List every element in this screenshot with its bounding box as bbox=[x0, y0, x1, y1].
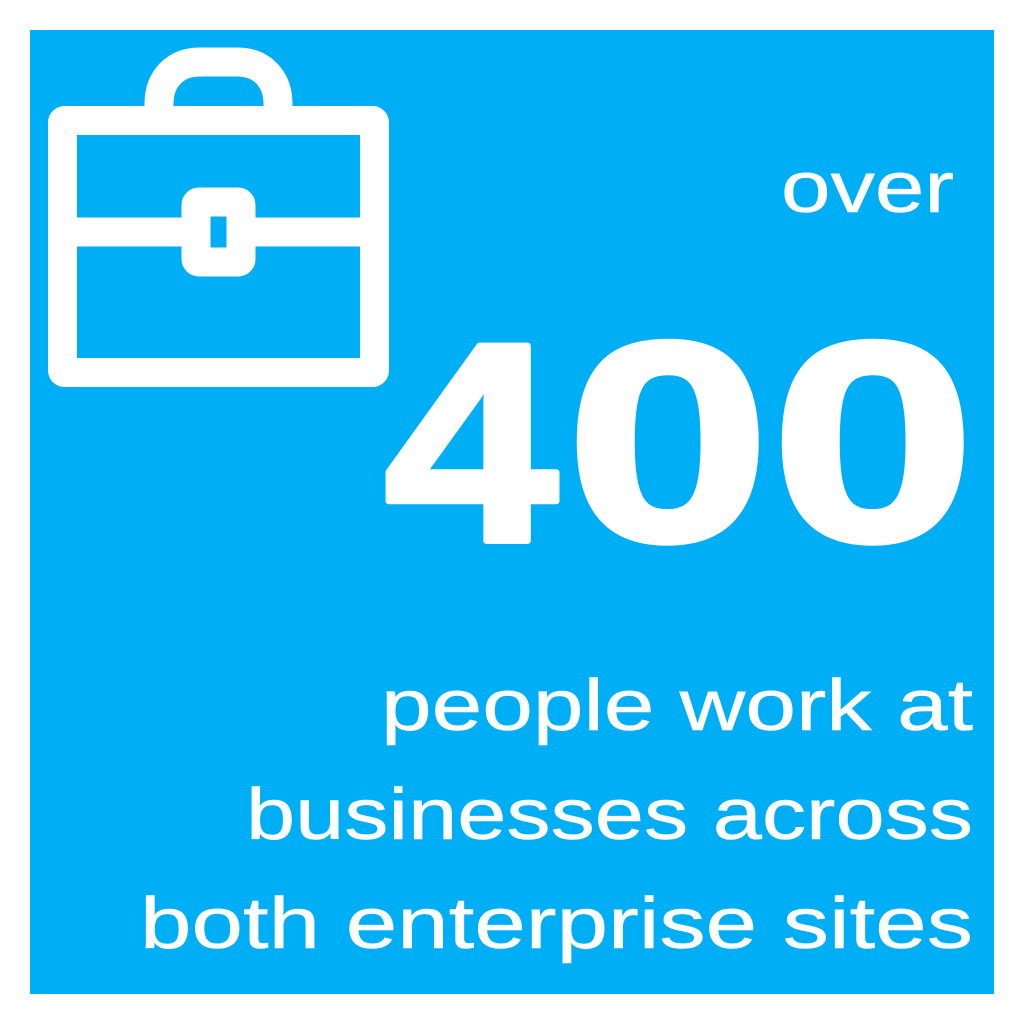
icon: briefcase bbox=[62, 62, 375, 372]
statistic: 400: 4 bbox=[384, 285, 560, 602]
statistic: 400: 0 bbox=[566, 284, 770, 601]
text: over: over bbox=[781, 148, 954, 228]
line 2: businesses across bbox=[246, 775, 973, 855]
statistic: 400: 0 bbox=[771, 284, 975, 601]
line 1: people work at bbox=[381, 666, 973, 746]
statistic: 400 bbox=[384, 284, 975, 602]
description text bbox=[140, 666, 973, 964]
line 3: both enterprise sites bbox=[140, 884, 973, 964]
